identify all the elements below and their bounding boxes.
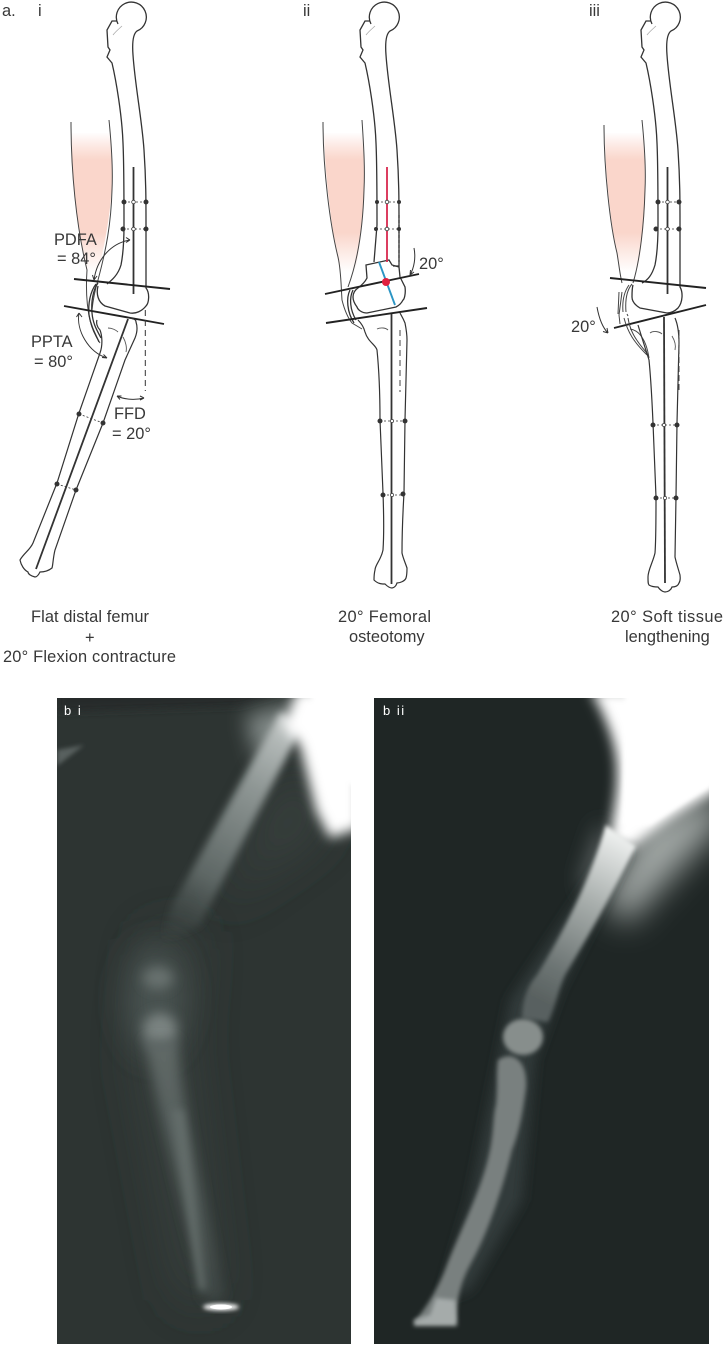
label ii: ii	[303, 2, 310, 20]
panel iii: soft tissue lengthening	[571, 2, 723, 646]
label b ii: b ii	[383, 703, 406, 718]
tibia	[358, 313, 407, 588]
muscle shading	[324, 133, 364, 272]
PDFA value: = 84°	[57, 250, 96, 268]
dashed femoral cortex	[398, 215, 400, 262]
tibia	[414, 1056, 526, 1322]
20 degree label: 20°	[571, 318, 596, 336]
haze beside femur	[274, 806, 302, 839]
panel ii: femoral osteotomy	[303, 2, 444, 646]
dashed reference line	[678, 330, 680, 392]
muscle shading	[71, 133, 112, 272]
soft tissue haze above femur	[245, 702, 296, 765]
caption i: Flat distal femur	[31, 608, 150, 626]
PPTA arrow	[76, 313, 107, 358]
tibia	[20, 318, 137, 577]
knee femoral condyle	[143, 967, 173, 989]
hip white area	[590, 690, 720, 848]
red centre of rotation	[382, 278, 390, 286]
small wedge upper left	[57, 745, 84, 766]
tibia shadow	[145, 1040, 224, 1300]
joint lines	[325, 274, 427, 323]
rotation arrow	[410, 248, 415, 275]
PPTA value: = 80°	[34, 353, 73, 371]
label b i: b i	[64, 703, 82, 718]
lengthened soft tissue strips	[618, 284, 649, 358]
dashed reference line	[399, 330, 401, 392]
knee	[503, 1019, 543, 1055]
tibial axis	[390, 314, 392, 584]
soft tissue haze around leg	[140, 930, 215, 1300]
tibial pins	[378, 419, 407, 497]
joint lines	[610, 278, 706, 328]
muscle outline	[71, 120, 112, 343]
caption ii line 2: osteotomy	[349, 628, 425, 646]
bright foot spot	[203, 1304, 239, 1310]
label i: i	[38, 2, 42, 20]
tibia	[638, 318, 680, 592]
FFD arrow	[117, 396, 144, 400]
femoral axis in red and pins	[374, 167, 401, 262]
thigh soft tissue glow	[605, 790, 720, 925]
bone halo	[460, 857, 632, 1294]
muscle outline	[323, 120, 364, 329]
foot	[414, 1298, 457, 1326]
FFD dashed reference line	[144, 310, 146, 391]
PPTA label: PPTA	[31, 333, 73, 351]
femur shadow	[170, 708, 299, 929]
PDFA label: PDFA	[54, 231, 97, 249]
tibial pins	[55, 412, 105, 492]
tibial pins	[651, 423, 679, 500]
tibial axis	[664, 317, 665, 583]
blue osteotomy line	[379, 262, 395, 305]
joint lines	[64, 279, 170, 324]
label iii: iii	[589, 2, 600, 20]
caption ii line 1: 20° Femoral	[338, 608, 431, 626]
FFD label: FFD	[114, 405, 146, 423]
femur	[522, 825, 636, 1022]
femoral axis and pins	[121, 167, 148, 294]
caption iii line 2: lengthening	[625, 628, 710, 646]
radiograph b i	[57, 690, 360, 1344]
hip white	[283, 690, 360, 838]
rotation arrow	[597, 307, 608, 333]
femur	[348, 2, 405, 323]
caption iii line 1: 20° Soft tissue	[611, 608, 723, 626]
panel i: flat distal femur with flexion contracture	[3, 2, 176, 666]
radiograph b ii	[374, 690, 720, 1344]
femoral axis and pins	[654, 167, 681, 294]
caption i line 3: 20° Flexion contracture	[3, 648, 176, 666]
PDFA arrow	[92, 238, 130, 280]
knee haze	[127, 945, 183, 1055]
FFD value: = 20°	[112, 425, 151, 443]
muscle outline	[604, 120, 645, 283]
femur	[632, 2, 682, 313]
top dark corner	[59, 698, 258, 710]
muscle shading	[605, 133, 645, 272]
panel label a: a.	[2, 2, 16, 20]
knee tibial plateau	[143, 1013, 177, 1047]
femur	[89, 2, 149, 342]
20 degree label: 20°	[419, 255, 444, 273]
plus sign: +	[85, 629, 95, 647]
